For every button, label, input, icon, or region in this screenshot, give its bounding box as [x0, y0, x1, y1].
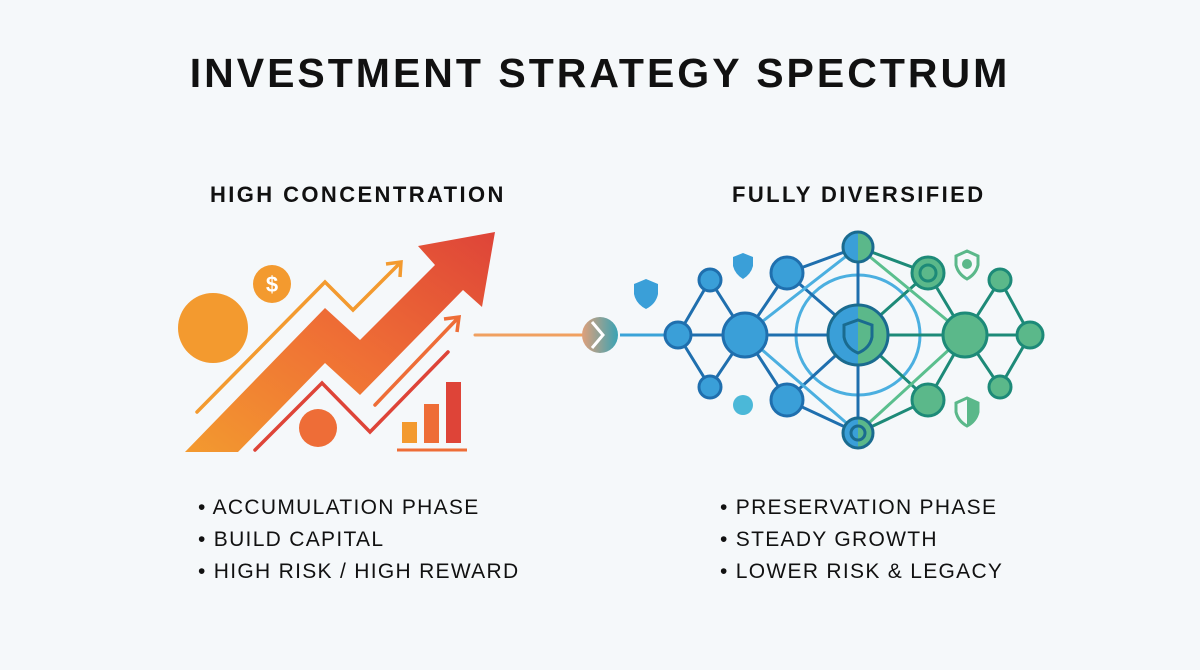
bullets: diversified: • LOWER RISK & LEGACY: [720, 560, 1003, 583]
bullets: concentration: • ACCUMULATION PHASE: [198, 496, 480, 519]
arrow: connector: [475, 317, 618, 353]
chart: concentration growth: $: [266, 272, 278, 297]
heading: fully diversified: FULLY DIVERSIFIED: [732, 182, 986, 207]
network: diversified: [620, 232, 1043, 448]
bullets: diversified: • STEADY GROWTH: [720, 528, 938, 551]
bullets: concentration: • HIGH RISK / HIGH REWARD: [198, 560, 519, 583]
title: INVESTMENT STRATEGY SPECTRUM: [190, 50, 1010, 96]
bullets: concentration: • BUILD CAPITAL: [198, 528, 384, 551]
bullets: diversified: [720, 496, 1003, 583]
chart: concentration growth: [178, 232, 495, 452]
heading: high concentration: HIGH CONCENTRATION: [210, 182, 506, 207]
bullets: concentration: [198, 496, 519, 583]
bullets: diversified: • PRESERVATION PHASE: [720, 496, 997, 519]
